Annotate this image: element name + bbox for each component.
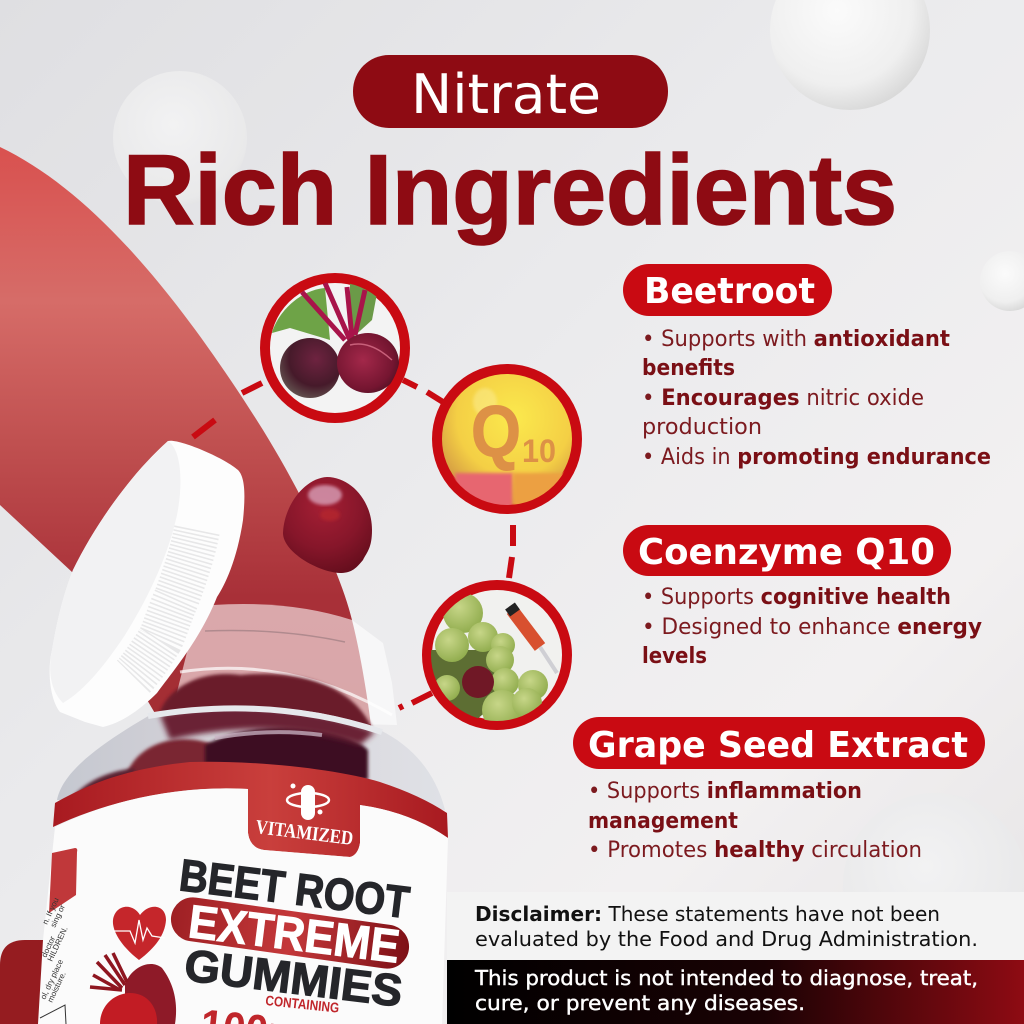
heading: Coenzyme Q10: Coenzyme Q10 [638,532,935,573]
text: Coenzyme Q10 benefits: • Supports cognitive health [642,585,951,610]
warning panel: This product is not intended to diagnose, treat, [474,966,978,990]
gummies [72,711,378,794]
falling grape [283,477,372,573]
text: Beetroot benefits: benefits [642,356,735,381]
text: Beetroot benefits: • Aids in promoting endurance [642,445,991,470]
warning panel: cure, or prevent any diseases. [475,991,805,1015]
heading: Grape Seed Extract: Grape Seed Extract [588,725,968,766]
text: Beetroot benefits [642,327,991,470]
icon: Q10 circle: Q [471,392,521,472]
product name [170,858,412,1024]
product name: EXTREME [186,894,403,973]
text: Coenzyme Q10 benefits: • Designed to enhance energy [642,615,982,640]
jar neck [160,604,397,728]
side label stripe and fine print: moisture. [46,970,68,1004]
text: Grape Seed Extract benefits [588,779,922,863]
brand logo: VITAMIZED [254,816,354,850]
text: Coenzyme Q10 benefits: levels [642,644,707,669]
text: Beetroot benefits: • Supports with antioxidant [642,327,950,352]
jar rim highlight [148,708,382,732]
Nitrate pill [353,55,668,128]
icon: Q10 circle: 10 [522,433,556,469]
title: Rich Ingredients [123,134,897,245]
text: Grape Seed Extract benefits: management [588,809,738,834]
label red band [53,762,448,857]
brand logo [254,784,354,850]
product name: CONTAINING [265,992,340,1016]
side label stripe and fine print: n. If you [41,896,61,926]
bottle [38,707,472,1024]
cap [50,441,244,727]
heading: Beetroot: Beetroot [644,271,815,312]
red swoosh [0,147,377,790]
disclaimer panel: evaluated by the Food and Drug Administration. [475,927,978,951]
text: Beetroot benefits: production [642,415,762,440]
text: Grape Seed Extract benefits: • Promotes healthy circulation [588,838,922,863]
upper gummies [160,674,372,728]
beet icon on label [90,953,176,1024]
jar shoulder glass [57,707,445,810]
side label stripe and fine print [39,848,77,1024]
side label stripe and fine print: ol, dry place [39,957,65,1001]
text: Beetroot benefits: • Encourages nitric oxide [642,386,924,411]
side label stripe and fine print: sing or [49,903,67,929]
Nitrate pill: Nitrate [411,63,601,126]
dashed connector [193,380,513,708]
warning panel [447,960,1024,1024]
product name: GUMMIES [182,939,405,1017]
icon: Q10 circle [437,369,577,513]
disclaimer panel: Disclaimer: These statements have not been [475,902,940,926]
heading: Beetroot [623,264,832,316]
label white [38,788,448,1024]
disclaimer panel [447,892,1024,960]
side label stripe and fine print: doctor [40,935,57,959]
icon: grape seed circle [427,585,567,730]
heart icon [113,907,166,960]
text: Coenzyme Q10 benefits [642,585,982,669]
icon: beetroot circle [265,278,405,418]
side label stripe and fine print: HILDREN. [46,925,70,963]
dark red corner block [0,940,80,1024]
product name: BEET ROOT [177,849,412,928]
text: Grape Seed Extract benefits: • Supports inflammation [588,779,862,804]
